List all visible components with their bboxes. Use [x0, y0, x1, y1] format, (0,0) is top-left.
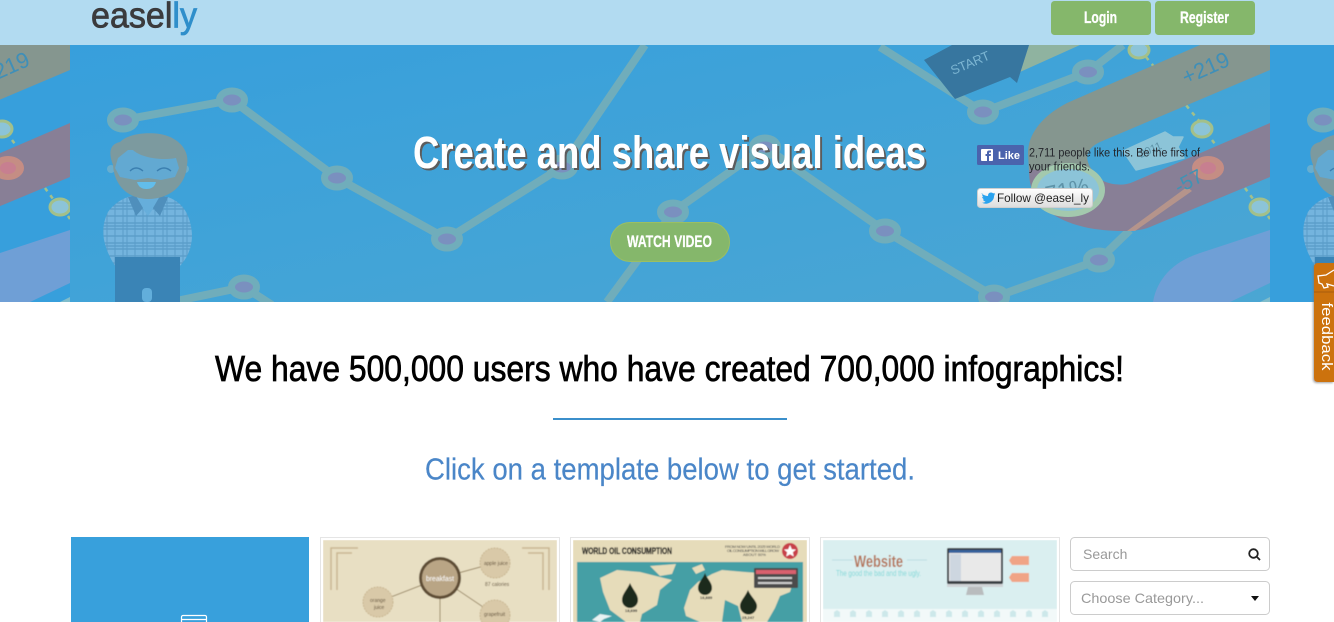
divider	[553, 418, 787, 420]
twitter follow button: Follow @easel_ly	[997, 191, 1089, 205]
icon: twitter bird	[981, 192, 995, 204]
card: website template	[820, 538, 1060, 622]
card: world oil consumption template: 16,889	[700, 595, 713, 600]
facebook like button: Like	[998, 150, 1020, 162]
apple juice node: 87 calories	[485, 582, 510, 588]
card: blank template	[71, 537, 309, 622]
category dropdown: Choose Category...	[1081, 590, 1204, 606]
card: world oil consumption template	[570, 538, 810, 622]
apple juice node: apple juice	[484, 561, 508, 567]
icon: magnifier	[1249, 549, 1260, 560]
footer markers	[834, 610, 1048, 617]
category dropdown	[1070, 582, 1270, 614]
icon: dropdown arrow	[1251, 596, 1259, 601]
orange juice node	[363, 587, 393, 617]
corner frames	[331, 548, 358, 590]
hero background illustration	[70, 42, 1270, 319]
chart nodes	[110, 63, 1112, 319]
twitter follow button	[978, 188, 1092, 208]
facebook like count text	[1029, 148, 1201, 174]
template note: ABOUT 60%	[743, 552, 766, 557]
search box	[1070, 538, 1270, 570]
search box: Search	[1083, 546, 1127, 562]
oil drops: 18,699	[625, 608, 638, 613]
register button: Register	[1180, 8, 1229, 27]
icon: facebook	[981, 149, 993, 161]
facebook like button	[977, 145, 1024, 165]
template note	[724, 545, 780, 556]
oil drops	[622, 583, 638, 613]
start flag	[924, 45, 1029, 99]
facebook like count text: your friends.	[1029, 162, 1090, 174]
date callout: 2011	[1137, 140, 1164, 161]
orange juice node: orange	[370, 598, 386, 604]
start flag: START	[948, 48, 992, 78]
template title: WORLD OIL CONSUMPTION	[582, 546, 672, 556]
apple juice node	[480, 548, 510, 588]
grapefruit juice node	[480, 600, 510, 622]
icon: browser window	[182, 616, 206, 622]
right repeated background	[1303, 108, 1334, 265]
template note: FROM NOW UNTIL 2025 WORLD	[725, 544, 780, 549]
percent circle: 71%	[1043, 173, 1091, 207]
breakfast node: breakfast	[426, 576, 454, 583]
star badge	[782, 543, 798, 559]
card: world oil consumption template: 25,247	[742, 615, 755, 620]
percent circle	[1031, 163, 1105, 217]
ring nodes	[1129, 42, 1270, 215]
price tags	[1009, 556, 1029, 565]
icon: man character	[103, 133, 192, 302]
grapefruit juice node: grapefruit	[484, 612, 506, 618]
band labels: +219	[1178, 47, 1233, 90]
hero background illustration: -57	[1171, 165, 1207, 198]
watch video button: WATCH VIDEO	[627, 232, 712, 251]
main heading: We have 500,000 users who have created 700,000 infographics!	[215, 348, 1124, 389]
header bar	[0, 0, 1334, 45]
barrel box	[754, 568, 798, 588]
orange juice node: juice	[373, 605, 385, 611]
card: breakfast template	[320, 538, 560, 622]
template title	[832, 559, 927, 561]
template subtitle: The good the bad and the ugly.	[836, 569, 921, 578]
card: website template: Website	[854, 552, 903, 571]
date callout	[1123, 132, 1184, 170]
feedback tab	[1314, 263, 1334, 382]
register button	[1155, 1, 1255, 35]
breakfast node	[419, 557, 461, 599]
panel: hero banner	[0, 42, 1334, 319]
login button	[1051, 1, 1151, 35]
world map	[577, 562, 803, 622]
icon: megaphone	[1318, 270, 1334, 288]
left repeated background	[0, 45, 70, 302]
subheading: Click on a template below to get started.	[425, 452, 915, 486]
facebook like count text: 2,711 people like this. Be the first of	[1029, 148, 1201, 160]
login button: Login	[1084, 8, 1117, 27]
hero title: Create and share visual ideas	[413, 127, 926, 178]
connector lines	[392, 566, 483, 622]
red node	[1192, 156, 1224, 180]
icon: monitor	[947, 548, 1003, 595]
watch video button	[610, 222, 730, 262]
template note: OIL CONSUMPTION WILL GROW	[727, 548, 779, 553]
